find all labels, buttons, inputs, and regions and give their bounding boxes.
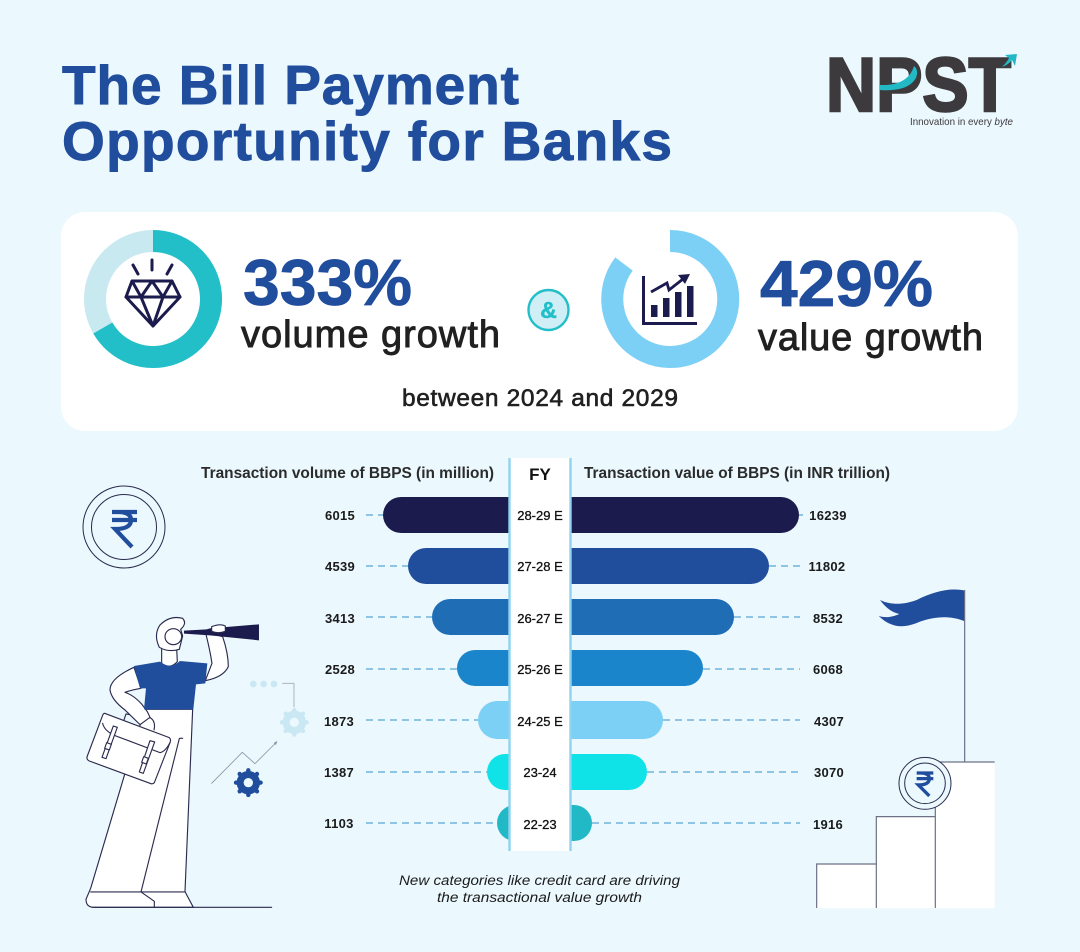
value values: 1916 bbox=[813, 817, 843, 832]
title: The Bill Payment bbox=[62, 54, 519, 116]
butterfly chart bbox=[324, 458, 847, 851]
volume values: 1387 bbox=[324, 765, 354, 780]
donut: volume growth bbox=[95, 241, 211, 357]
volume values: 3413 bbox=[325, 611, 355, 626]
volume values: 1103 bbox=[324, 816, 354, 831]
raised arm bbox=[205, 632, 228, 681]
stat: 429%: 429% bbox=[760, 247, 933, 320]
lowered arm and hand bbox=[110, 667, 150, 725]
title: Opportunity for Banks bbox=[62, 110, 672, 172]
volume values bbox=[324, 508, 355, 831]
briefcase bbox=[124, 714, 155, 730]
FY column: 23-24 bbox=[523, 765, 557, 780]
value values: 3070 bbox=[814, 765, 844, 780]
steps bbox=[817, 762, 995, 908]
chart heading: value: Transaction value of BBPS (in INR trillion) bbox=[584, 465, 890, 482]
logo: NPST: Innovation in every byte bbox=[910, 116, 1013, 128]
neck bbox=[162, 647, 177, 666]
flag bbox=[879, 590, 965, 626]
value values bbox=[809, 508, 847, 832]
trousers and shoes bbox=[86, 709, 193, 907]
bars bbox=[383, 497, 799, 841]
caption: New categories like credit card are driving bbox=[399, 873, 681, 888]
stat: 333%: 333% bbox=[243, 246, 412, 319]
volume values: 2528 bbox=[325, 662, 355, 677]
value values: 11802 bbox=[809, 559, 845, 574]
rupee coin bbox=[899, 757, 951, 809]
telescope bbox=[184, 624, 259, 640]
value values: 6068 bbox=[813, 662, 843, 677]
FY column: 25-26 E bbox=[517, 662, 563, 677]
caption bbox=[399, 873, 681, 905]
connector dots bbox=[250, 681, 277, 687]
growth arrow bbox=[212, 742, 277, 783]
panel: growth summary bbox=[61, 212, 1018, 431]
icon: bar chart bbox=[642, 274, 697, 325]
FY column: 27-28 E bbox=[517, 559, 563, 574]
label: value growth: value growth bbox=[758, 317, 983, 359]
icon: diamond bbox=[126, 260, 180, 326]
FY column: FY bbox=[529, 465, 552, 484]
FY column: 28-29 E bbox=[517, 508, 563, 523]
value values: 16239 bbox=[809, 508, 847, 523]
title bbox=[62, 54, 672, 172]
caption: the transactional value growth bbox=[437, 890, 642, 905]
volume values: 1873 bbox=[324, 714, 354, 729]
label: time period: between 2024 and 2029 bbox=[402, 385, 678, 412]
donut: value growth bbox=[612, 241, 728, 357]
FY column: 24-25 E bbox=[517, 714, 563, 729]
ampersand badge: & bbox=[540, 297, 557, 323]
label: volume growth: volume growth bbox=[241, 314, 500, 356]
icon: rupee coin bbox=[83, 486, 165, 568]
value values: 8532 bbox=[813, 611, 843, 626]
ampersand badge bbox=[528, 290, 568, 330]
value values: 4307 bbox=[814, 714, 844, 729]
head and hair bbox=[156, 617, 185, 651]
logo: NPST: NPST bbox=[826, 43, 1011, 128]
volume values: 4539 bbox=[325, 559, 355, 574]
FY column bbox=[509, 458, 571, 851]
chart heading: volume: Transaction volume of BBPS (in million) bbox=[201, 465, 494, 482]
gear: pale bbox=[282, 710, 307, 735]
dashed leader lines bbox=[366, 515, 803, 823]
t-shirt bbox=[134, 661, 207, 709]
illustration: steps with flag bbox=[817, 590, 995, 908]
FY column: 26-27 E bbox=[517, 611, 563, 626]
gear: blue bbox=[236, 770, 261, 795]
volume values: 6015 bbox=[325, 508, 355, 523]
illustration: man with telescope bbox=[86, 617, 307, 907]
FY column: 22-23 bbox=[523, 817, 557, 832]
